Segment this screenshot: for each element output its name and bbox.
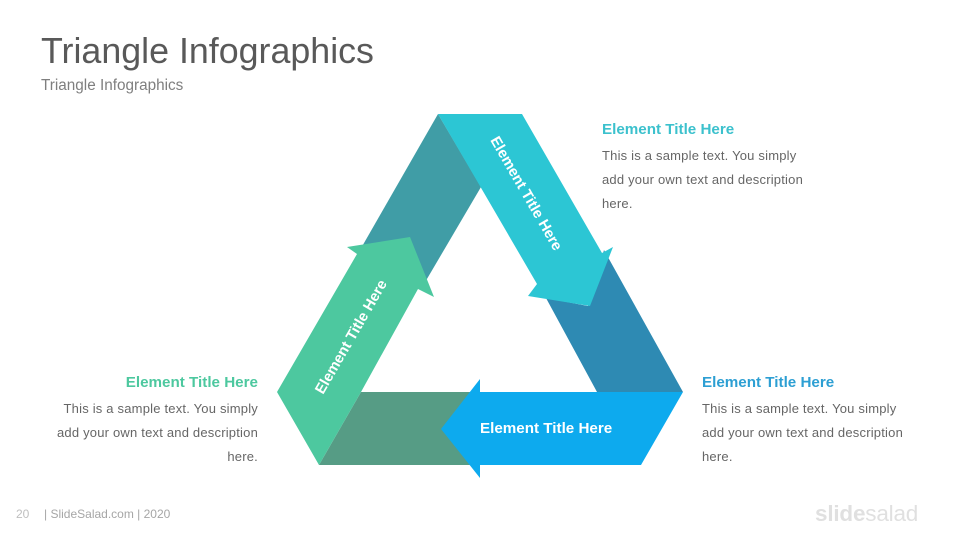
arrow: cyan: Element Title Here: [487, 134, 565, 254]
segment: dark blue fold: [546, 250, 683, 392]
body: This is a sample text. You simply: [602, 148, 796, 163]
body: add your own text and description: [602, 172, 803, 187]
text block: top right: [602, 120, 803, 211]
body: here.: [602, 196, 633, 211]
arrow: green: Element Title Here: [313, 277, 391, 397]
body: add your own text and description: [57, 425, 258, 440]
heading: Element Title Here: [126, 374, 258, 390]
body: [57, 401, 258, 464]
text block: bottom right: [702, 374, 903, 464]
body: This is a sample text. You simply: [64, 401, 258, 416]
body: [702, 401, 903, 464]
arrow: blue: Element Title Here: [480, 420, 612, 437]
body: This is a sample text. You simply: [702, 401, 896, 416]
body: here.: [702, 449, 733, 464]
body: [602, 148, 803, 211]
page number: 20: [16, 507, 29, 521]
logo: slidesalad: [815, 501, 918, 526]
body: add your own text and description: [702, 425, 903, 440]
title: Triangle Infographics: [41, 31, 374, 71]
arrow: green: [277, 237, 434, 465]
arrow: cyan: [438, 114, 613, 306]
footer text: | SlideSalad.com | 2020: [44, 507, 170, 521]
heading: Element Title Here: [602, 120, 734, 138]
text block: bottom left: [57, 374, 258, 464]
heading: Element Title Here: [702, 374, 834, 390]
body: here.: [227, 449, 258, 464]
subtitle: Triangle Infographics: [41, 77, 183, 94]
segment: dark green fold: [319, 392, 482, 465]
arrow: blue: [441, 379, 683, 478]
segment: teal fold: [360, 114, 481, 284]
